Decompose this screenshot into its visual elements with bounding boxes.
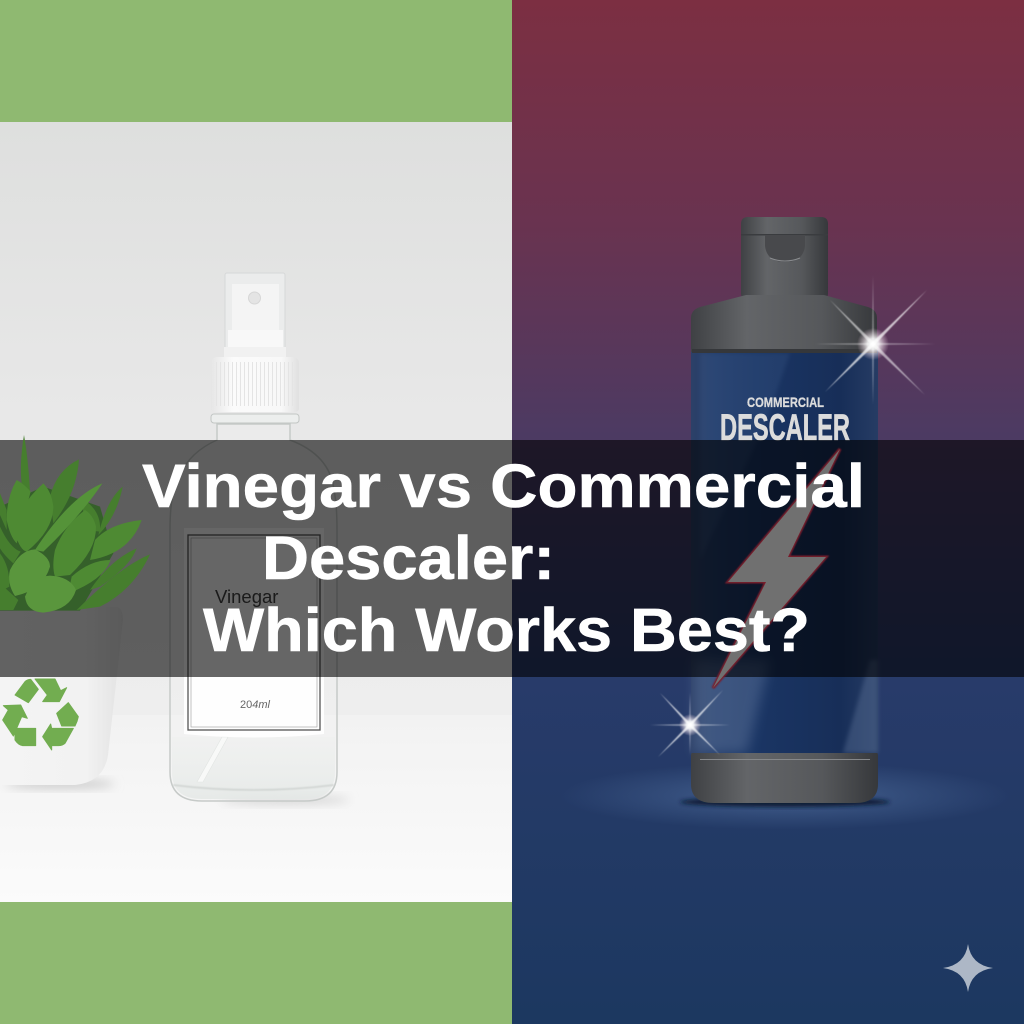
blue body xyxy=(691,350,878,756)
title: Vinegar vs Commercial xyxy=(142,452,865,520)
dip tube xyxy=(197,737,228,782)
glass body xyxy=(170,424,337,801)
icon: corner sparkle xyxy=(943,944,993,992)
product name: COMMERCIAL xyxy=(747,394,824,410)
title: Descaler: xyxy=(262,524,555,592)
clear spray cap xyxy=(224,273,286,357)
icon: commercial descaler bottle xyxy=(650,217,935,807)
label: Vinegar xyxy=(215,586,278,607)
glass lower liquid xyxy=(172,737,335,799)
product name: DESCALER xyxy=(720,407,850,448)
neck flange xyxy=(211,414,299,423)
flip cap xyxy=(741,217,828,297)
label: 204ml xyxy=(240,699,271,711)
base xyxy=(691,753,878,803)
icon: vinegar spray bottle xyxy=(170,273,350,804)
icon: sparkle top xyxy=(815,275,935,405)
icon: succulent plant xyxy=(0,435,150,613)
icon: recycling arrows xyxy=(3,679,78,750)
ribbed collar xyxy=(211,357,299,412)
product name xyxy=(720,394,850,448)
label xyxy=(184,528,324,738)
title band xyxy=(0,440,1024,677)
panel: vinegar side background xyxy=(0,0,512,1024)
icon: white plant pot with recycling symbol xyxy=(0,607,123,788)
icon: lightning bolt xyxy=(713,449,840,688)
icon: sparkle bottom xyxy=(650,690,730,757)
panel: commercial descaler side background xyxy=(512,0,1024,1024)
shoulder xyxy=(691,295,877,352)
title xyxy=(142,452,865,664)
title: Which Works Best? xyxy=(203,596,810,664)
